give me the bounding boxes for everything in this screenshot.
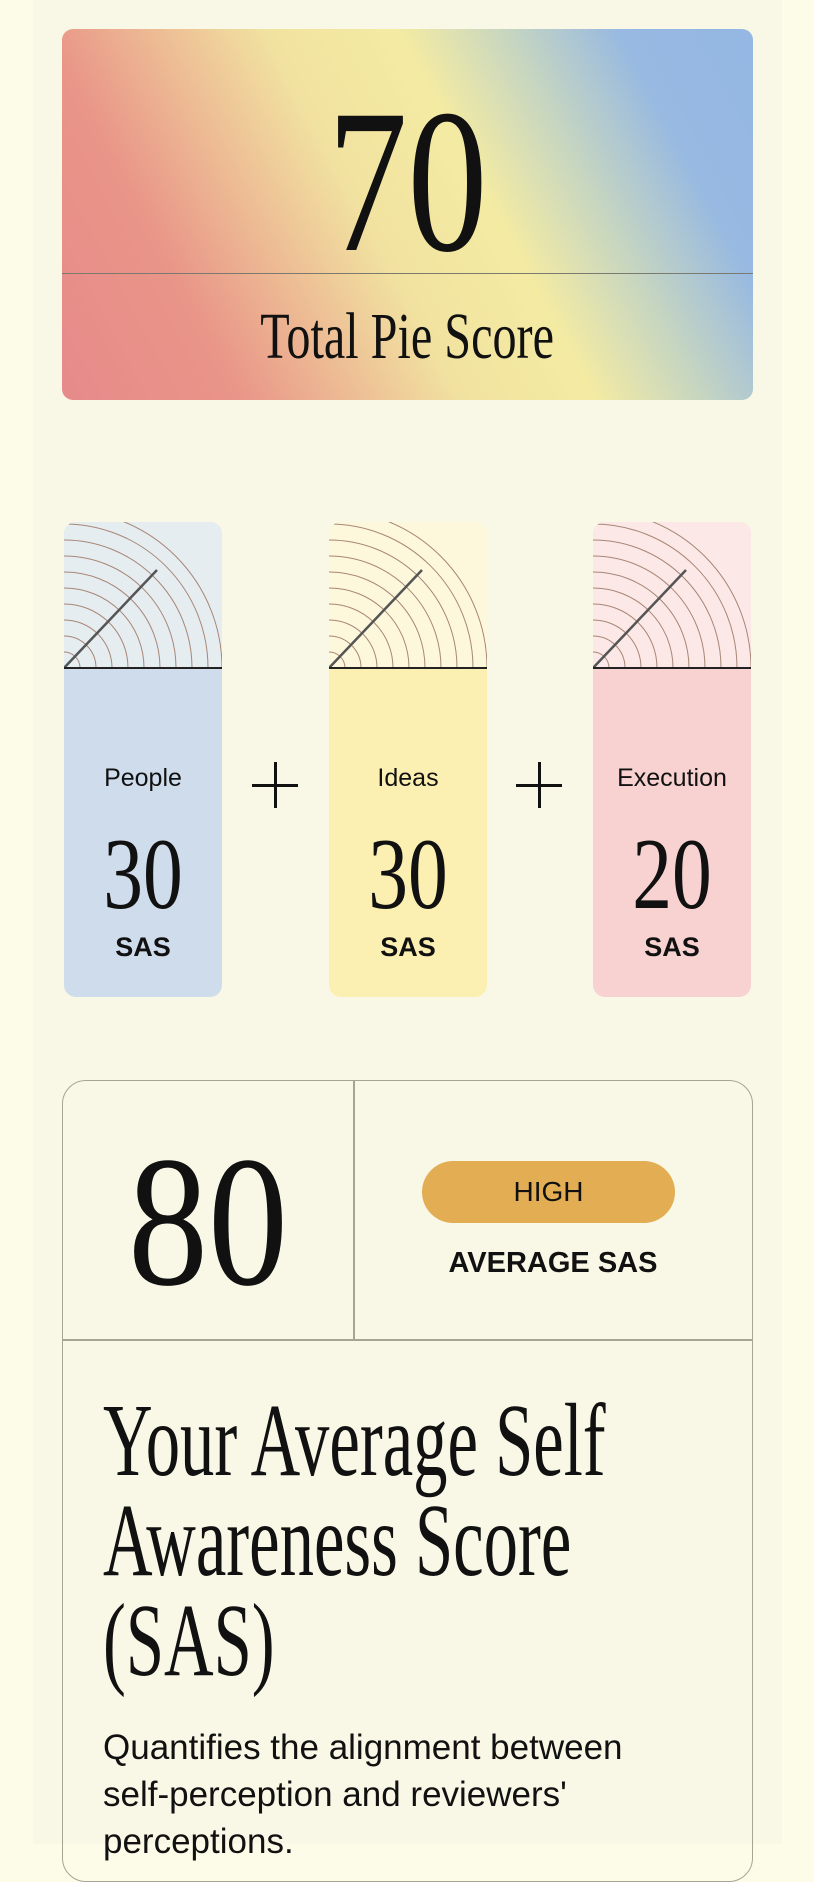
bar: Execution: SAS (644, 932, 700, 962)
bar: Ideas: SAS (380, 932, 436, 962)
bar: People (64, 522, 222, 997)
bar: People: SAS (115, 932, 171, 962)
bar: People: 30 (103, 818, 183, 931)
heading: (SAS) (103, 1583, 275, 1698)
label: AVERAGE SAS: AVERAGE SAS (449, 1247, 657, 1279)
plus sign (516, 762, 562, 808)
bar: Ideas: 30 (368, 818, 448, 931)
bar: Execution: 20 (632, 818, 712, 931)
plus sign (252, 762, 298, 808)
description text: Quantifies the alignment between self-perception and reviewers' perceptions. (103, 1728, 622, 1861)
icon: quarter arcs (329, 522, 487, 668)
icon: quarter arcs (64, 522, 222, 668)
panel: average SAS card (62, 1080, 753, 1882)
bar: Execution (593, 522, 751, 997)
badge: HIGH (422, 1161, 675, 1223)
heading (103, 1383, 606, 1698)
bar: People: People (104, 764, 182, 792)
badge: HIGH: HIGH (514, 1176, 584, 1207)
bar: Execution: Execution (617, 764, 727, 792)
heading: Awareness Score (103, 1483, 571, 1598)
bar: Ideas (329, 522, 487, 997)
big number 80: 80 (128, 1119, 288, 1325)
heading: Your Average Self (103, 1383, 606, 1498)
label: Total Pie Score: Total Pie Score (261, 300, 554, 373)
total score number: 70 (328, 68, 487, 295)
bar: Ideas: Ideas (377, 764, 439, 792)
icon: quarter arcs (593, 522, 751, 668)
panel: total pie score (62, 29, 753, 400)
